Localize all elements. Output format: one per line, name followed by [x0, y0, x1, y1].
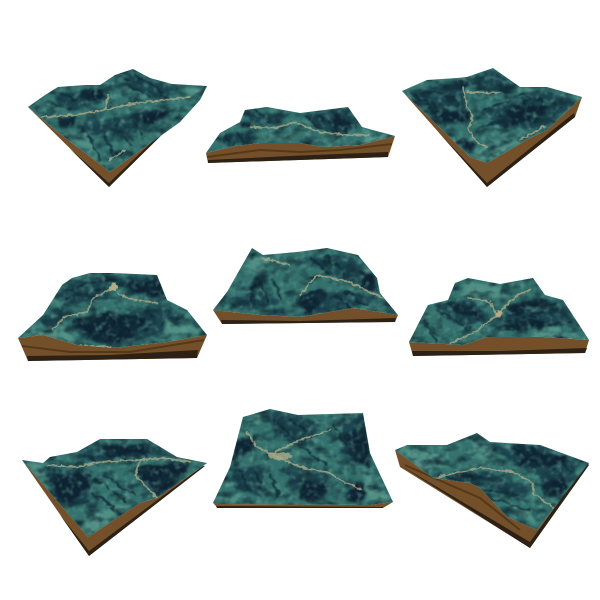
terrain block: top right — [402, 68, 582, 187]
terrain block: bottom right — [390, 430, 595, 548]
terrain block: middle left — [18, 273, 207, 361]
terrain block: middle right — [409, 278, 589, 356]
terrain block: bottom centre — [213, 409, 393, 508]
terrain block: bottom left — [22, 439, 207, 556]
terrain block: top left — [28, 69, 207, 187]
terrain block: middle centre — [213, 248, 398, 324]
terrain block: top centre — [206, 107, 395, 163]
